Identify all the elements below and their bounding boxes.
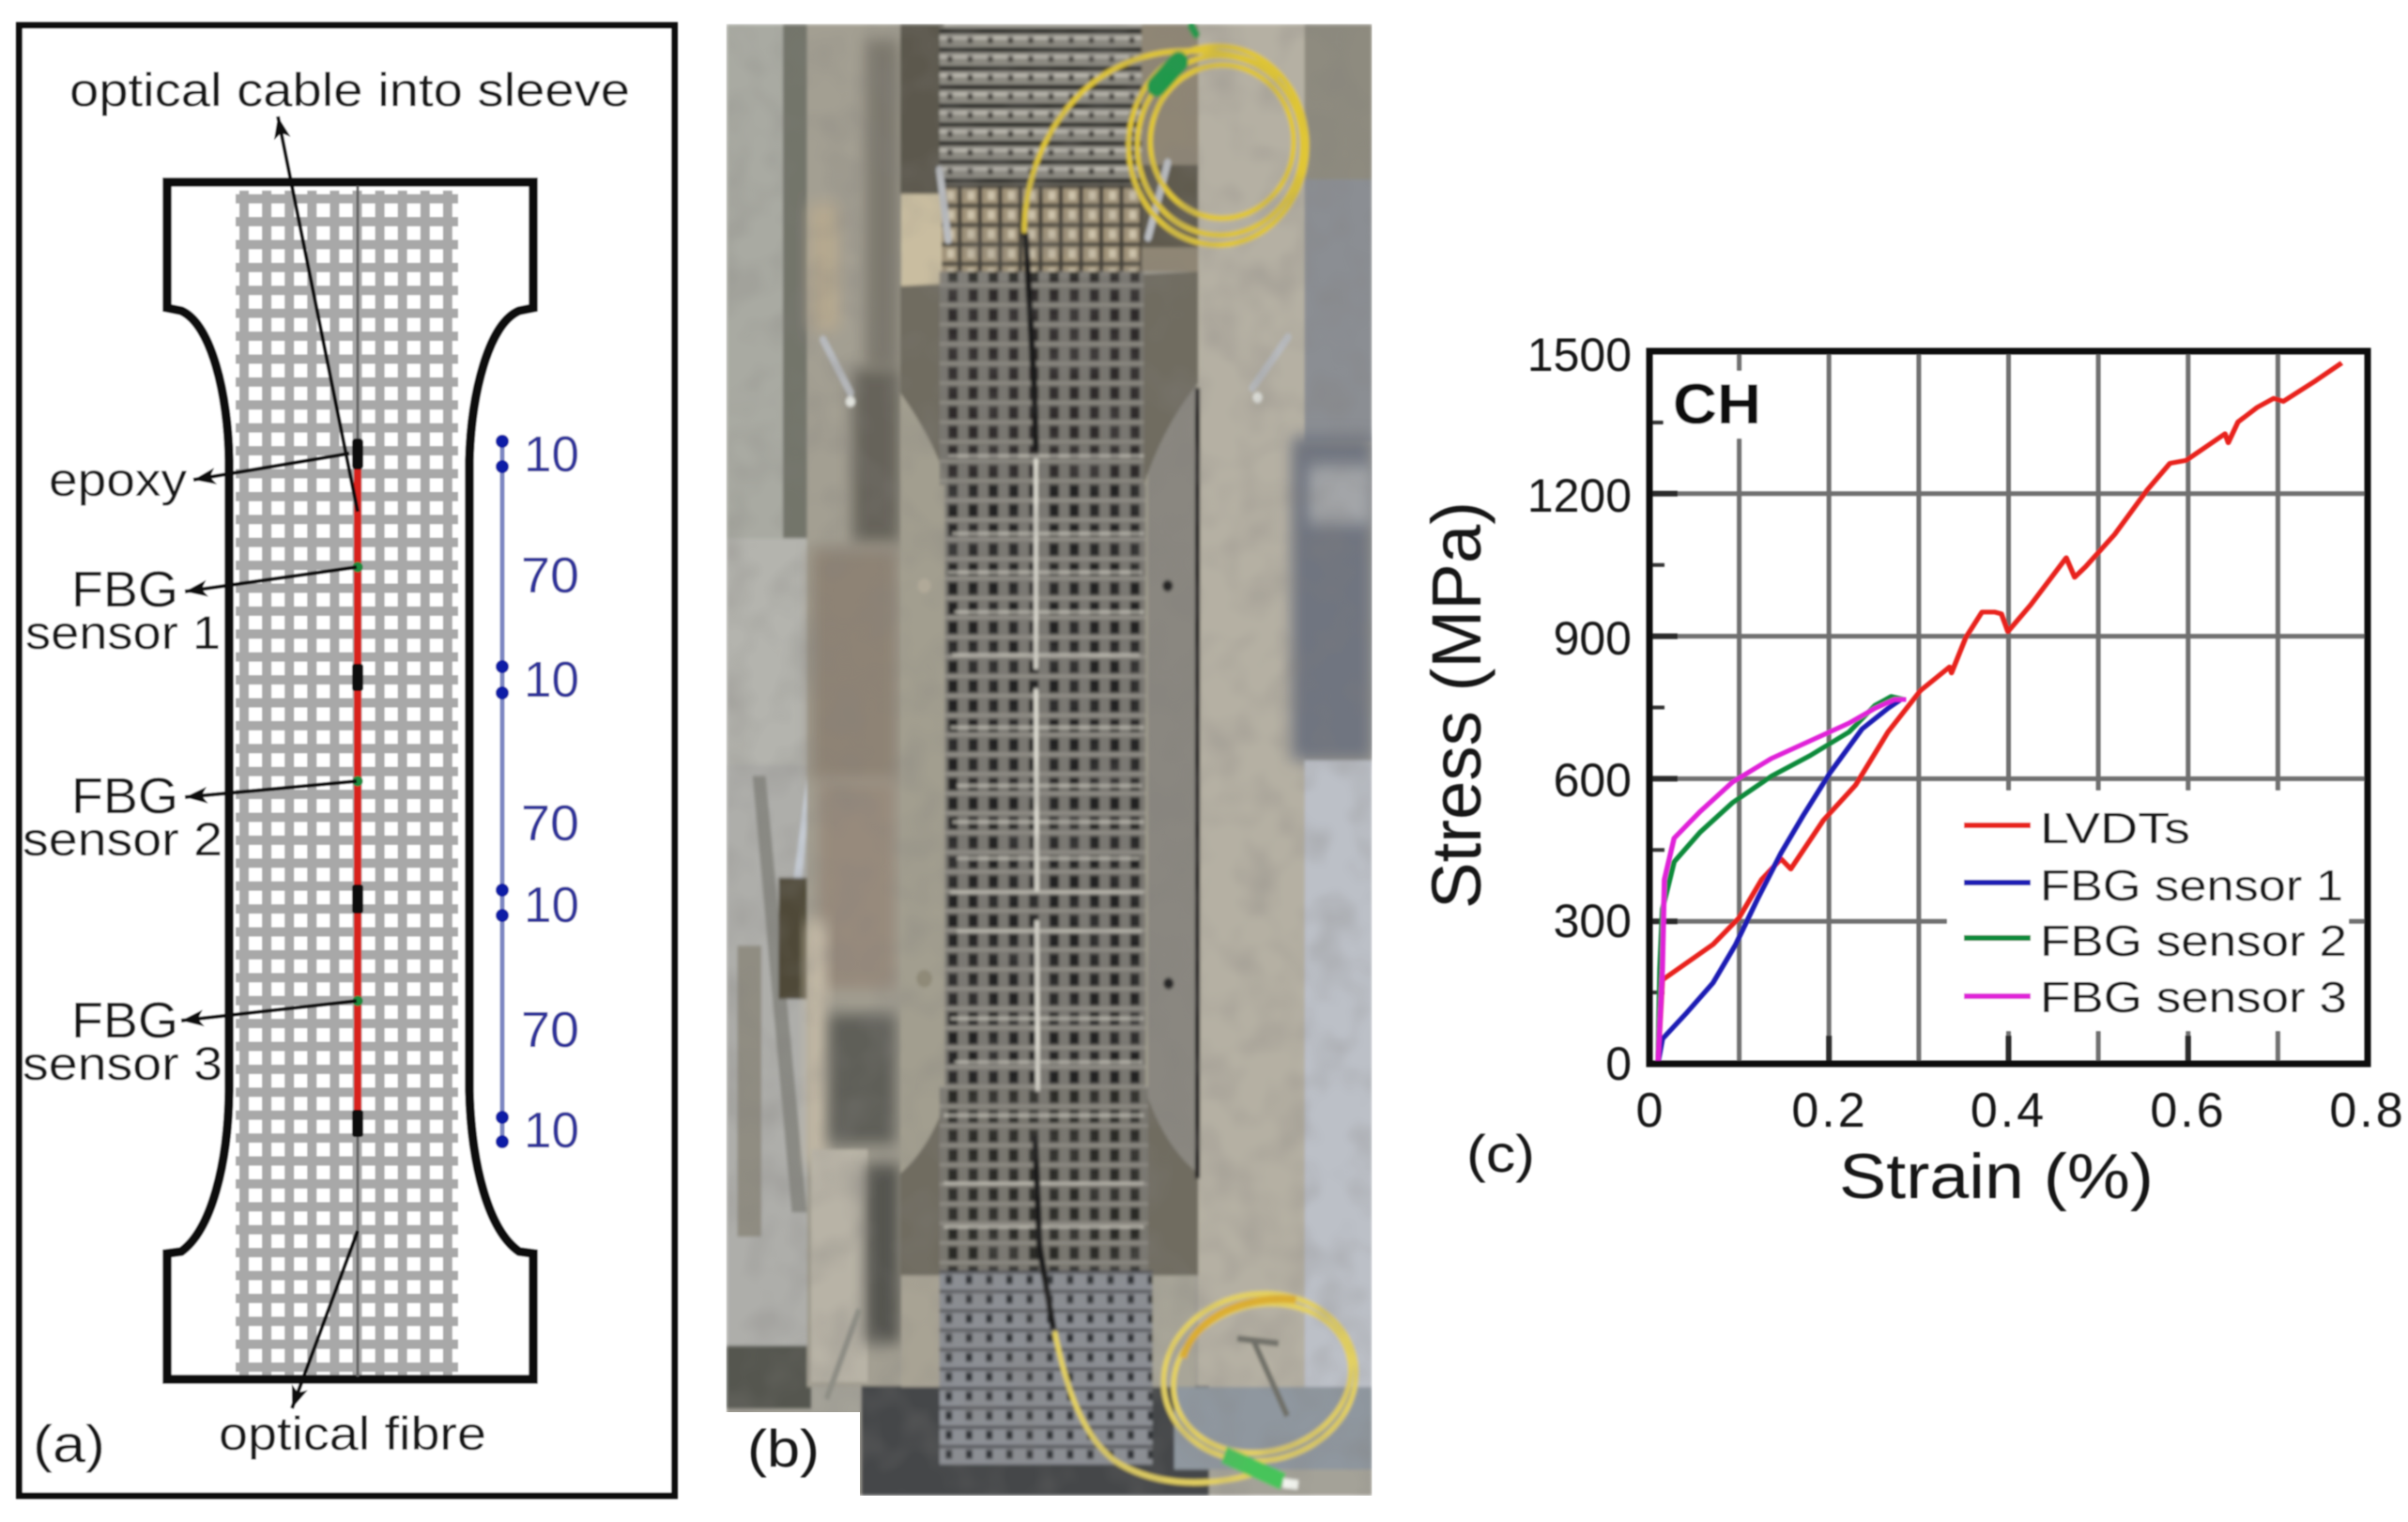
x axis tick labels: 0.4 — [1971, 1084, 2047, 1138]
steel mould plate — [900, 291, 1198, 1275]
lower mould blocks — [901, 1275, 1195, 1387]
bottom ground and base — [861, 1386, 1372, 1496]
callout labels: optical cable into sleeve — [69, 64, 630, 116]
optical fibre with sensor segments — [352, 186, 363, 1376]
legend: FBG sensor 3 — [2040, 973, 2347, 1022]
legend: FBG sensor 1 — [2040, 861, 2343, 910]
callout labels: FBG — [71, 561, 178, 618]
y axis tick labels: 300 — [1554, 895, 1632, 947]
dimension line: 10 — [524, 877, 579, 933]
lower bolts — [826, 1310, 1287, 1416]
major ticks — [1649, 494, 2188, 1064]
right plastic sheet — [1292, 24, 1372, 1391]
callout arrows — [181, 116, 358, 1408]
callout labels: epoxy — [49, 454, 187, 506]
curve: FBG sensor 1 — [1658, 700, 1901, 1064]
mesh highlight wires — [943, 456, 1143, 1227]
photo base — [727, 24, 1372, 1496]
centre sensing fibre line — [1036, 458, 1037, 1091]
bolts — [823, 162, 1288, 392]
y axis tick labels: 1200 — [1527, 469, 1632, 522]
label b: (b) — [747, 1419, 820, 1478]
dimension line: 70 — [521, 795, 579, 852]
black sleeves — [1025, 233, 1053, 1329]
dog-bone specimen outline — [167, 182, 533, 1379]
minor ticks — [1649, 423, 1664, 992]
callout labels — [23, 64, 630, 1473]
dimension line: 10 — [524, 426, 579, 483]
data curves — [1658, 363, 2341, 1064]
dimension line: 70 — [521, 547, 579, 604]
panel frame — [19, 25, 674, 1496]
plot frame — [1649, 351, 2368, 1064]
y axis tick labels: 0 — [1605, 1038, 1632, 1090]
left plastic sheet — [727, 24, 811, 1408]
callout labels: FBG — [71, 768, 178, 824]
reinforcement grid — [236, 191, 458, 1375]
wire mesh — [940, 26, 1153, 1465]
legend: LVDTs — [2040, 804, 2190, 853]
curve: LVDTs — [1658, 363, 2341, 1064]
label background CH — [1664, 371, 1772, 438]
callout labels: (a) — [33, 1414, 105, 1473]
y axis title: Stress (MPa) — [1418, 501, 1495, 909]
bottom yellow fibre coil — [1054, 1284, 1364, 1483]
dimension line — [496, 426, 579, 1159]
right concrete band — [1198, 24, 1305, 1387]
photo mottling — [728, 24, 1372, 1496]
y axis tick labels — [1527, 329, 1632, 1090]
concrete band left — [807, 24, 900, 1387]
panel b: photograph of specimen — [723, 24, 1372, 1506]
photo corner cut-out — [723, 1412, 860, 1506]
top corners — [900, 24, 1198, 291]
y axis tick labels: 900 — [1554, 612, 1632, 665]
x axis tick labels: 0.6 — [2150, 1084, 2227, 1138]
curve: FBG sensor 3 — [1658, 700, 1906, 1064]
legend background — [1947, 791, 2349, 1031]
callout labels: FBG — [71, 992, 178, 1049]
mould edge line — [1195, 388, 1200, 1178]
x axis tick labels — [1636, 1084, 2406, 1138]
top green connector — [1157, 26, 1196, 86]
label c: (c) — [1466, 1124, 1535, 1183]
series tag CH: CH — [1673, 373, 1761, 436]
washers and holes — [846, 392, 1263, 990]
x axis tick labels: 0 — [1636, 1084, 1663, 1138]
panel c: stress-strain chart — [1418, 329, 2406, 1212]
grid lines — [1649, 351, 2368, 1064]
bottom green connector — [1224, 1455, 1298, 1485]
legend: FBG sensor 2 — [2040, 916, 2347, 965]
curve: FBG sensor 2 — [1658, 697, 1904, 1064]
callout labels: optical fibre — [219, 1407, 486, 1460]
callout labels: sensor 3 — [23, 1038, 222, 1090]
panel a: specimen schematic — [19, 25, 674, 1496]
dimension line: 10 — [524, 1102, 579, 1159]
dog-bone plate — [900, 271, 1198, 1275]
callout labels: sensor 1 — [25, 607, 221, 659]
top yellow fibre coil — [1024, 46, 1307, 245]
dimension line: 70 — [521, 1002, 579, 1058]
legend — [1964, 804, 2347, 1022]
callout labels: sensor 2 — [23, 813, 222, 866]
y axis tick labels: 600 — [1554, 754, 1632, 807]
y axis tick labels: 1500 — [1527, 329, 1632, 381]
dimension line: 10 — [524, 652, 579, 708]
x axis title: Strain (%) — [1839, 1141, 2154, 1212]
x axis tick labels: 0.8 — [2329, 1084, 2406, 1138]
x axis tick labels: 0.2 — [1791, 1084, 1868, 1138]
